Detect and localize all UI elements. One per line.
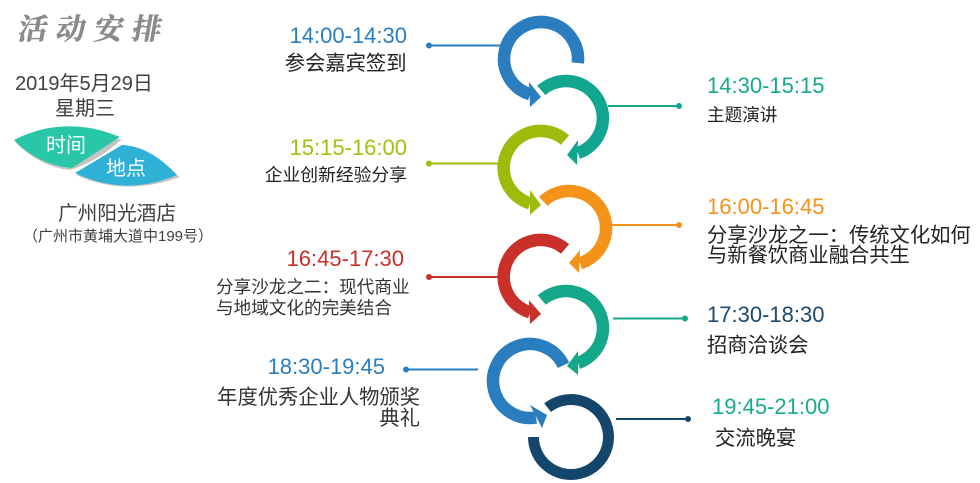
step 1: 14:00-14:30: 14:00-14:30 xyxy=(290,23,407,48)
connector 5 xyxy=(426,274,498,280)
date: 2019年5月29日 xyxy=(15,72,153,95)
badge: time: 时间 xyxy=(46,134,86,157)
arrow 3 xyxy=(504,131,565,215)
badge: location: 地点 xyxy=(106,157,146,180)
connector 3 xyxy=(426,160,498,166)
arrow 6 xyxy=(542,291,603,375)
arrow 2 xyxy=(541,81,603,165)
step 4: 16:00-16:45: 16:00-16:45 xyxy=(707,194,824,219)
step 3: 15:15-16:00: 15:15-16:00 xyxy=(290,135,407,160)
connector 4 xyxy=(612,222,682,228)
connector 7 xyxy=(403,366,478,372)
step 2: 14:30-15:15 xyxy=(707,73,824,125)
step 5: 16:45-17:30: 16:45-17:30 xyxy=(287,246,404,271)
step 8: 19:45-21:00: 交流晚宴 xyxy=(715,427,796,450)
arrow 7 xyxy=(493,344,564,428)
title: 活动安排 xyxy=(15,6,175,48)
badge: location xyxy=(75,145,180,187)
step 5: 16:45-17:30 xyxy=(216,246,410,318)
arrow 5 xyxy=(504,240,565,324)
step 5: 16:45-17:30: 分享沙龙之二：现代商业 xyxy=(216,277,410,297)
step 8: 19:45-21:00 xyxy=(712,394,829,450)
ring 8 xyxy=(534,400,609,475)
step 4: 16:00-16:45: 分享沙龙之一：传统文化如何 xyxy=(707,224,971,247)
step 7: 18:30-19:45: 年度优秀企业人物颁奖 xyxy=(217,386,420,409)
connector 1 xyxy=(426,42,500,48)
step 7: 18:30-19:45: 典礼 xyxy=(379,407,420,430)
date xyxy=(15,72,153,120)
step 3: 15:15-16:00: 企业创新经验分享 xyxy=(265,165,407,185)
step 6: 17:30-18:30: 17:30-18:30 xyxy=(707,302,824,327)
badge: time xyxy=(14,126,122,170)
step 2: 14:30-15:15: 14:30-15:15 xyxy=(707,73,824,98)
date: 星期三 xyxy=(55,98,115,120)
step 6: 17:30-18:30 xyxy=(707,302,824,357)
venue: （广州市黄埔大道中199号） xyxy=(23,228,213,245)
step 1: 14:00-14:30 xyxy=(285,23,407,75)
step 4: 16:00-16:45: 与新餐饮商业融合共生 xyxy=(707,244,910,267)
arrow 4 xyxy=(543,191,606,273)
connector 2 xyxy=(608,103,682,109)
step 2: 14:30-15:15: 主题演讲 xyxy=(707,105,777,125)
arrow 1 xyxy=(504,22,578,107)
step 4: 16:00-16:45 xyxy=(707,194,971,267)
step 7: 18:30-19:45 xyxy=(217,354,420,430)
connector 6 xyxy=(613,316,688,322)
step 3: 15:15-16:00 xyxy=(265,135,407,185)
step 5: 16:45-17:30: 与地域文化的完美结合 xyxy=(216,298,392,318)
step 6: 17:30-18:30: 招商洽谈会 xyxy=(707,334,808,357)
venue xyxy=(23,203,213,245)
connector 8 xyxy=(616,416,691,422)
step 7: 18:30-19:45: 18:30-19:45 xyxy=(268,354,385,379)
venue: 广州阳光酒店 xyxy=(58,203,176,225)
step 1: 14:00-14:30: 参会嘉宾签到 xyxy=(285,52,406,75)
step 8: 19:45-21:00: 19:45-21:00 xyxy=(712,394,829,419)
